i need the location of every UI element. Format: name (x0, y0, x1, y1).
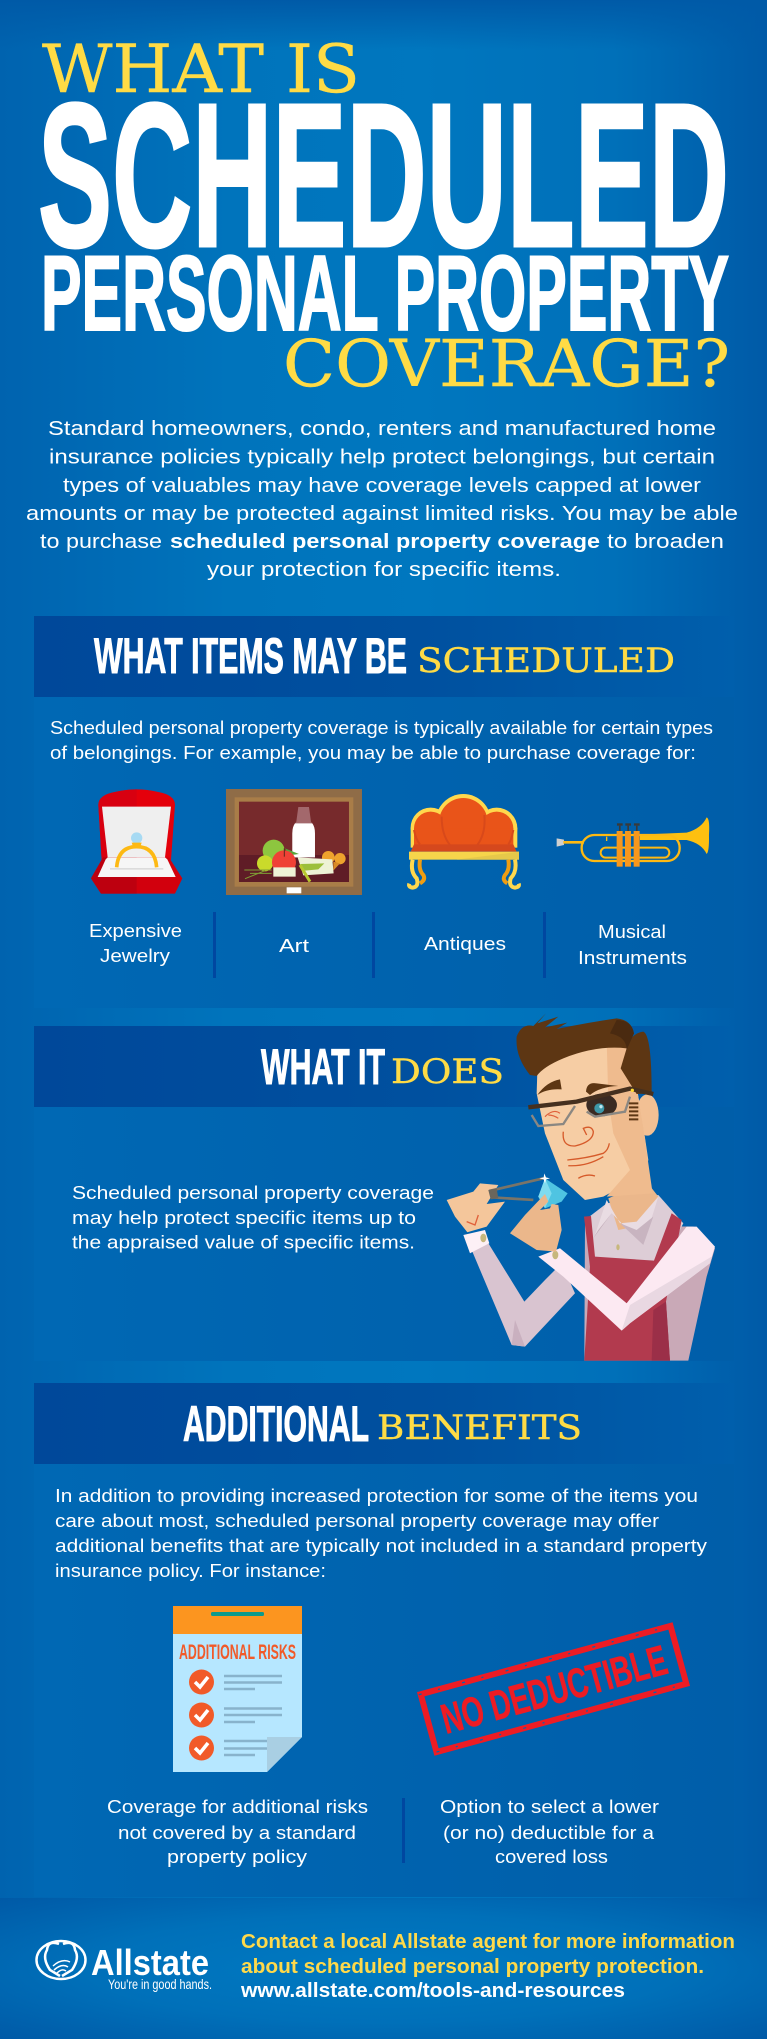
label: musical instruments (578, 921, 687, 968)
intro paragraph: scheduled personal property coverage (170, 530, 600, 553)
caption: lower deductible: (or no) deductible for a (443, 1822, 655, 1843)
logo tagline: You're in good hands. (108, 1976, 212, 1992)
icon: additional risks checklist (173, 1606, 302, 1772)
allstate logo (36, 1941, 212, 1992)
footer (36, 1931, 735, 2002)
panel: additional benefits (34, 1383, 734, 1897)
caption: lower deductible: Option to select a lower (440, 1796, 659, 1817)
intro paragraph: insurance policies typically help protect belongings, but certain (49, 446, 715, 468)
icon: additional risks checklist: ADDITIONAL RISKS (179, 1641, 296, 1664)
logo emblem: hands oval (36, 1941, 86, 1979)
panel header bar (34, 616, 734, 697)
description text: may help protect specific items up to (72, 1207, 416, 1228)
intro paragraph: to broaden (607, 530, 724, 553)
caption: additional risks: property policy (167, 1846, 308, 1867)
heading: SCHEDULED (417, 641, 675, 681)
description text: the appraised value of specific items. (72, 1232, 415, 1252)
heading: WHAT IT (261, 1039, 385, 1095)
title line: coverage: COVERAGE? (283, 327, 730, 402)
panel intro text: of belongings. For example, you may be able to purchase coverage for: (50, 742, 696, 763)
heading: BENEFITS (377, 1408, 582, 1448)
caption: additional risks (107, 1796, 368, 1867)
panel intro text: In addition to providing increased protection for some of the items you (55, 1485, 698, 1506)
panel intro text: Scheduled personal property coverage is typically available for certain types (50, 717, 713, 738)
label: art: Art (279, 935, 309, 956)
contact call to action (240, 1931, 735, 2002)
description text (72, 1182, 434, 1252)
panel header bar (34, 1026, 734, 1107)
description text: Scheduled personal property coverage (72, 1182, 434, 1203)
panel intro text: care about most, scheduled personal property coverage may offer (55, 1510, 659, 1531)
panel: what it does (34, 1013, 734, 1361)
label: expensive jewelry (89, 920, 182, 966)
icon: trumpet (557, 817, 709, 867)
panel intro text (50, 717, 713, 763)
panel: what items may be scheduled (34, 616, 734, 1008)
heading: ADDITIONAL (183, 1396, 369, 1452)
intro paragraph: types of valuables may have coverage levels capped at lower (63, 474, 701, 497)
panel header bar (34, 1383, 734, 1464)
intro paragraph: your protection for specific items. (207, 558, 561, 581)
intro paragraph (26, 417, 738, 581)
caption: lower deductible (440, 1796, 659, 1867)
label: expensive jewelry: Expensive (89, 920, 182, 941)
caption: additional risks: Coverage for additional risks (107, 1796, 368, 1817)
label: musical instruments: Musical (598, 921, 666, 942)
contact call to action: www.allstate.com/tools-and-resources (240, 1980, 625, 2002)
icon: antique settee (409, 794, 519, 888)
icon: framed still life painting (226, 789, 362, 895)
intro paragraph: amounts or may be protected against limited risks. You may be able (26, 502, 738, 525)
contact call to action: Contact a local Allstate agent for more information (241, 1931, 735, 1953)
label: antiques: Antiques (424, 933, 506, 954)
label: expensive jewelry: Jewelry (100, 945, 171, 966)
illustration: jeweler inspecting a gem (447, 1013, 715, 1361)
title line: what is: WHAT IS (42, 31, 360, 108)
panel intro text: additional benefits that are typically not included in a standard property (55, 1535, 708, 1556)
contact call to action: about scheduled personal property protection. (241, 1956, 704, 1978)
icon: no deductible stamp (419, 1625, 689, 1753)
caption: additional risks: not covered by a standard (118, 1822, 356, 1843)
heading: DOES (391, 1052, 504, 1092)
heading: WHAT ITEMS MAY BE (94, 628, 407, 684)
label: musical instruments: Instruments (578, 947, 687, 968)
panel intro text: insurance policy. For instance: (55, 1560, 326, 1581)
intro paragraph: to purchase (40, 530, 162, 553)
logo wordmark: Allstate (91, 1942, 209, 1983)
intro paragraph: Standard homeowners, condo, renters and manufactured home (48, 417, 716, 440)
icon: jewelry box with ring (91, 789, 182, 894)
caption: lower deductible: covered loss (495, 1846, 608, 1867)
panel intro text (55, 1485, 708, 1581)
title (38, 31, 730, 402)
